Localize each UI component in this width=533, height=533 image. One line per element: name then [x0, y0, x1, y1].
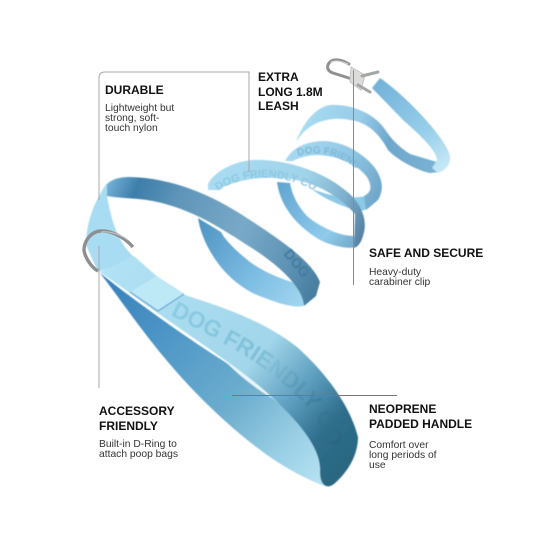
middle loop band [208, 160, 365, 248]
text block: durable [105, 83, 174, 134]
top band of handle loop [107, 177, 320, 306]
inner return of top band [198, 218, 318, 307]
text block: neoprene padded handle: Comfort over [369, 440, 429, 451]
text block: neoprene padded handle: long periods of [369, 450, 437, 461]
text block: extra long leash: EXTRA [258, 70, 299, 84]
text block: extra long leash [258, 70, 323, 113]
D-ring [84, 231, 133, 271]
fourth loop and strap to clip [296, 78, 450, 173]
printed strap text: DOG [284, 248, 308, 277]
padded underside [100, 273, 325, 486]
text block: safe and secure: Heavy-duty [369, 266, 421, 278]
handle strap [100, 256, 358, 486]
text block: accessory friendly: ACCESSORY [99, 404, 175, 418]
callout line: durable [99, 72, 249, 388]
white sliver between strap and padding [228, 364, 272, 398]
callout line: safe and secure [352, 70, 354, 285]
text block: accessory friendly: FRIENDLY [99, 418, 158, 432]
printed strap text: DOG FRIENDLY CO [172, 302, 322, 406]
text block: durable: Lightweight but [105, 102, 174, 114]
text block: neoprene padded handle: NEOPRENE [369, 402, 436, 416]
text block: safe and secure: SAFE AND SECURE [369, 246, 483, 260]
text block: durable: touch nylon [105, 123, 158, 134]
text block: durable: DURABLE [105, 83, 164, 97]
callout line: neoprene [232, 394, 397, 396]
text block: safe and secure [369, 246, 483, 288]
third loop [285, 141, 382, 211]
text block: extra long leash: LONG 1.8M [258, 84, 323, 98]
text block: neoprene padded handle: use [369, 460, 386, 471]
text block: safe and secure: carabiner clip [369, 277, 430, 288]
text block: neoprene padded handle [369, 402, 472, 471]
printed strap text [172, 146, 358, 406]
middle loop inner return [277, 182, 356, 248]
text block: extra long leash: LEASH [258, 99, 299, 113]
printed strap text: DOG FRIENDLY CO [214, 170, 317, 191]
text block: accessory friendly [99, 404, 178, 460]
text block: durable: strong, soft- [105, 113, 159, 124]
printed strap text: DOG FRIEND [296, 146, 358, 168]
stitched patch [130, 276, 184, 311]
text block: accessory friendly: Built-in D-Ring to [99, 439, 177, 450]
text block: accessory friendly: attach poop bags [99, 449, 178, 460]
carabiner clip [328, 60, 378, 92]
text block: neoprene padded handle: PADDED HANDLE [369, 416, 472, 430]
light strap section at D-ring [86, 183, 135, 272]
